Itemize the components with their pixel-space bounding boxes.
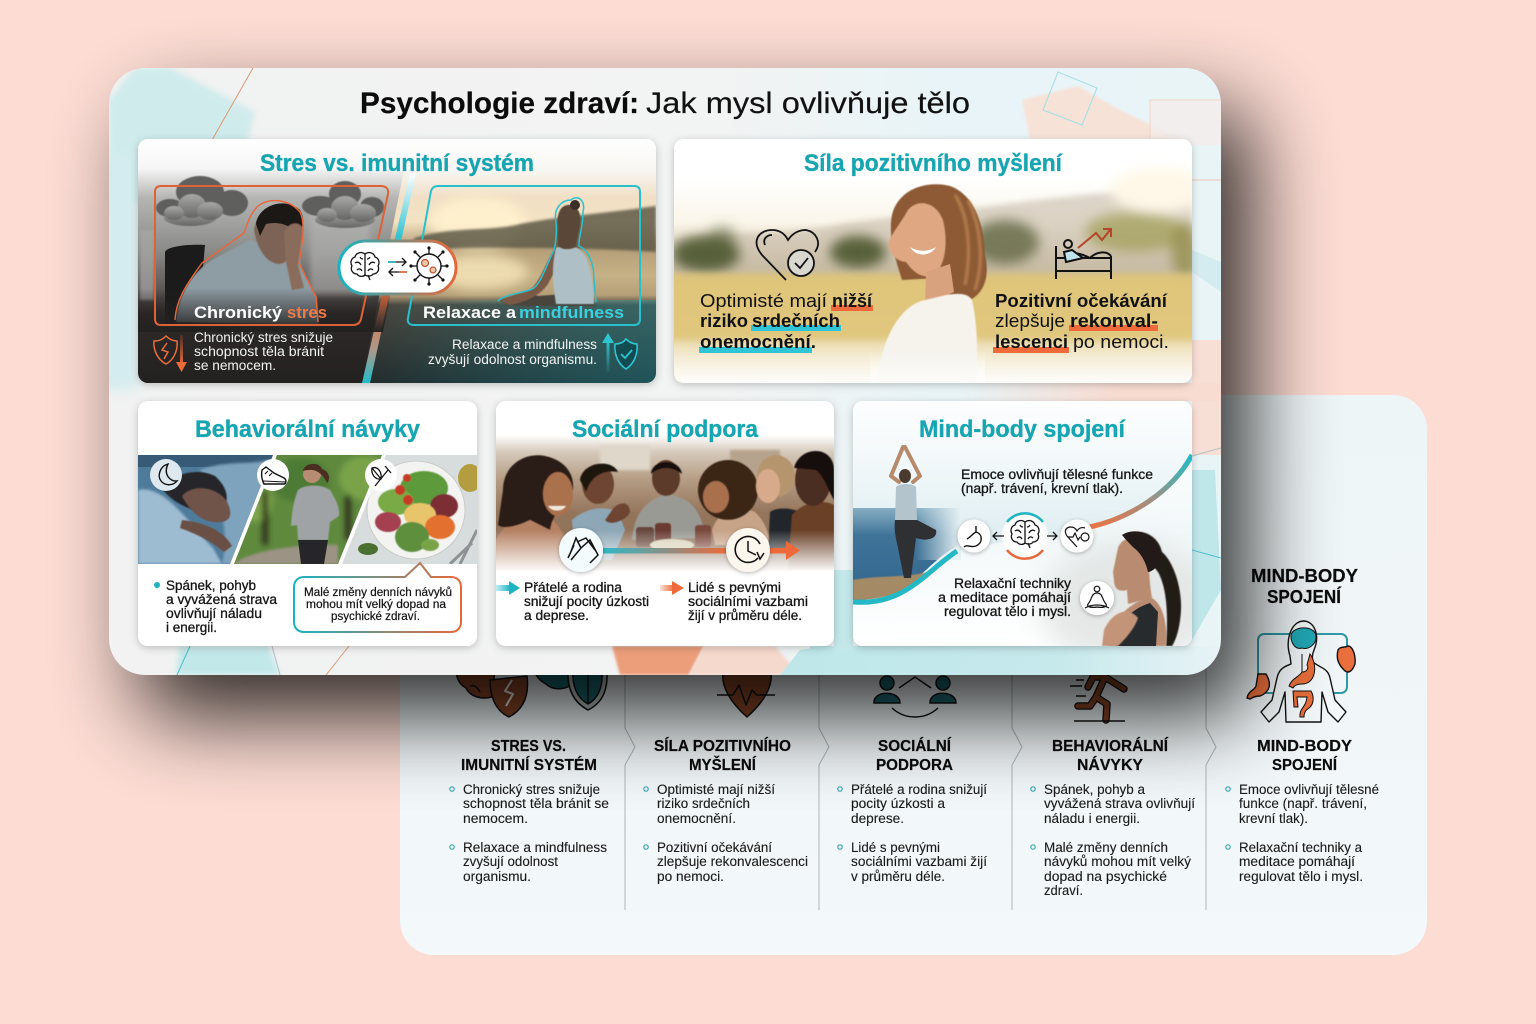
title: Jak mysl ovlivňuje tělo	[646, 87, 970, 120]
backdrop: sky and wave	[853, 435, 1192, 646]
panel: back summary sheet	[400, 395, 1427, 955]
heading: mind-body top label: MIND-BODY	[1251, 566, 1358, 586]
icon: stomach	[958, 520, 990, 552]
text: optimists	[699, 290, 873, 353]
text: positive expectation	[993, 290, 1169, 353]
column: stres vs. imunitní systém: zvyšují odolnost	[463, 854, 558, 869]
heading: mind-body spojení: Mind-body spojení	[919, 416, 1126, 443]
arrow: teal	[496, 581, 520, 595]
icon: brain and broken shield	[456, 660, 528, 717]
text: strong social ties: sociálními vazbami	[688, 594, 808, 609]
icon: heart with check	[757, 230, 818, 280]
column: behaviorální návyky: BEHAVIORÁLNÍ	[1052, 736, 1169, 755]
text: emotions	[961, 467, 1153, 496]
column: stres vs. imunitní systém	[450, 738, 609, 884]
column: mind-body spojení: regulovat tělo i mysl.	[1239, 869, 1363, 884]
icon: brain ring with arrows	[993, 513, 1057, 559]
panel: síla pozitivního myšlení	[668, 139, 1210, 383]
column: behaviorální návyky: zdraví.	[1044, 883, 1083, 898]
column: síla pozitivního myšlení: Optimisté mají nižší	[657, 782, 775, 797]
stressed scene backdrop	[138, 139, 418, 383]
text: positive expectation: rekonval-	[1070, 310, 1158, 331]
icon: shield with up arrow	[602, 333, 637, 372]
text: relaxation description: Relaxace a mindfulness	[452, 337, 597, 352]
column: mind-body spojení	[1226, 738, 1379, 884]
column: stres vs. imunitní systém: Chronický stres snižuje	[463, 782, 600, 797]
column: sociální podpora: Přátelé a rodina snižují	[851, 782, 987, 797]
icon: handshake	[559, 528, 603, 572]
text: optimists: riziko	[700, 310, 748, 331]
label: chronický stres: Chronický	[194, 303, 283, 322]
column: síla pozitivního myšlení: po nemoci.	[657, 869, 724, 884]
callout: small changes: psychické zdraví.	[331, 611, 420, 623]
label: relaxace a mindfulness: mindfulness	[519, 303, 624, 322]
panel: stres vs. imunitní systém	[138, 139, 656, 383]
icon: leaf and fork	[365, 459, 397, 491]
icon: heart with stethoscope	[1060, 520, 1094, 552]
text: strong social ties: žijí v průměru déle.	[688, 608, 802, 623]
text: friends and family: Přátelé a rodina	[524, 580, 623, 595]
column: mind-body spojení: MIND-BODY	[1257, 738, 1352, 755]
center pill: brain and virus	[339, 241, 456, 294]
column: behaviorální návyky: Malé změny denních	[1044, 840, 1168, 855]
photo: salad plate	[340, 455, 482, 564]
column: síla pozitivního myšlení: riziko srdečních	[657, 796, 750, 811]
text: positive expectation: Pozitivní očekávání	[995, 290, 1168, 311]
text: chronic stress description: Chronický stres snižuje	[194, 330, 333, 345]
text: chronic stress description	[194, 332, 332, 370]
arrow: orange	[660, 581, 684, 595]
column: sociální podpora: v průměru déle.	[851, 869, 945, 884]
icon: moon	[150, 459, 182, 491]
column: sociální podpora: PODPORA	[876, 757, 953, 774]
text: optimists: onemocnění.	[700, 331, 816, 352]
text: strong social ties: Lidé s pevnými	[688, 580, 781, 595]
column: behaviorální návyky: vyvážená strava ovlivňují	[1044, 796, 1195, 811]
icon: mind-body figure with organs	[1247, 621, 1355, 722]
text: chronic stress description: se nemocem.	[194, 358, 276, 373]
label: chronický stres	[194, 306, 326, 322]
column: stres vs. imunitní systém: STRES VS.	[491, 738, 566, 755]
orange frame	[155, 186, 388, 325]
text: optimists: srdečních	[752, 310, 840, 331]
text: sleep and exercise: a vyvážená strava	[166, 592, 277, 607]
icon: heart with pulse	[717, 672, 775, 717]
icon: patient in bed with growth arrow	[1056, 229, 1111, 279]
arrow: connector bar	[603, 541, 800, 560]
column: mind-body spojení: SPOJENÍ	[1272, 755, 1338, 774]
meditating woman	[498, 198, 596, 306]
diagonal divider	[362, 173, 416, 383]
heading: sociální podpora: Sociální podpora	[572, 416, 759, 443]
clouds	[156, 176, 384, 228]
text: sleep and exercise: i energii.	[166, 620, 217, 635]
column: mind-body spojení: meditace pomáhají	[1239, 854, 1355, 869]
column: sociální podpora	[838, 736, 987, 884]
column: mind-body spojení: krevní tlak).	[1239, 811, 1308, 826]
stressed man at desk	[138, 201, 392, 332]
column: stres vs. imunitní systém: Relaxace a mindfulness	[463, 840, 607, 855]
column dividers	[625, 660, 1216, 910]
front card shadow	[139, 110, 1251, 717]
column: behaviorální návyky: dopad na psychické	[1044, 869, 1167, 884]
text: optimists: nižší	[832, 290, 873, 311]
column: síla pozitivního myšlení	[644, 736, 808, 884]
text: sleep and exercise: ovlivňují náladu	[166, 606, 262, 621]
panel: front card	[100, 68, 1221, 675]
sunny meadow backdrop	[674, 166, 1192, 383]
photo: sleeping woman	[138, 455, 278, 564]
photo: jogging woman	[230, 455, 391, 564]
column: síla pozitivního myšlení: SÍLA POZITIVNÍHO	[654, 736, 791, 755]
callout: small changes	[294, 563, 461, 632]
photo: breathing woman	[1102, 531, 1181, 646]
column: sociální podpora: pocity úzkosti a	[851, 796, 945, 811]
column: behaviorální návyky: návyků mohou mít velký	[1044, 854, 1191, 869]
text: sleep and exercise	[154, 578, 277, 635]
column: síla pozitivního myšlení: onemocnění.	[657, 811, 736, 826]
text: friends and family: a deprese.	[524, 608, 589, 623]
text: optimists: Optimisté mají	[700, 290, 828, 311]
calm lake backdrop	[362, 139, 656, 383]
text: emotions: Emoce ovlivňují tělesné funkce	[961, 467, 1153, 482]
column: sociální podpora: deprese.	[851, 811, 904, 826]
column: síla pozitivního myšlení: MYŠLENÍ	[689, 755, 757, 774]
heading: mind-body top label: SPOJENÍ	[1267, 586, 1342, 607]
icon: running shoe	[257, 459, 289, 491]
text: positive expectation: lescenci	[995, 331, 1068, 352]
icon: brain and protective shield	[534, 660, 607, 710]
heading: stres vs. imunitní systém: Stres vs. imunitní systém	[260, 150, 534, 177]
heading: behaviorální návyky: Behaviorální návyky	[195, 416, 421, 443]
wave: orange to teal right segment	[1090, 455, 1192, 527]
text: relaxation techniques	[938, 576, 1071, 619]
teal frame	[408, 186, 640, 325]
column: sociální podpora: SOCIÁLNÍ	[878, 736, 952, 755]
photo: friends at a table	[496, 437, 834, 570]
wave: teal left segment	[853, 551, 957, 602]
icon: two connected people	[874, 676, 956, 717]
text: strong social ties	[688, 580, 808, 623]
column: síla pozitivního myšlení: zlepšuje rekonvalescenci	[657, 854, 808, 869]
heading: mind-body top label	[1251, 566, 1358, 607]
panel: behaviorální návyky	[138, 401, 482, 646]
callout: small changes: mohou mít velký dopad na	[306, 599, 447, 611]
column: behaviorální návyky: NÁVYKY	[1077, 755, 1143, 774]
text: relaxation techniques: Relaxační techniky	[954, 576, 1071, 591]
label: chronický stres: stres	[287, 303, 327, 322]
text: relaxation techniques: a meditace pomáhají	[938, 590, 1071, 605]
heading: síla pozitivního myšlení: Síla pozitivního myšlení	[804, 150, 1063, 177]
text: positive expectation: po nemoci.	[1073, 331, 1169, 352]
backdrop: right woman	[1040, 540, 1220, 670]
text: relaxation techniques: regulovat tělo i mysl.	[944, 604, 1071, 619]
panel: sociální podpora	[496, 401, 834, 646]
column: stres vs. imunitní systém: organismu.	[463, 869, 531, 884]
text: relaxation description: zvyšují odolnost organismu.	[428, 352, 597, 367]
label: relaxace a mindfulness: Relaxace a	[423, 303, 517, 322]
column: behaviorální návyky	[1031, 736, 1195, 898]
photo: sea and yoga woman	[853, 447, 961, 600]
text: relaxation description	[428, 337, 597, 367]
column: behaviorální návyky: Spánek, pohyb a	[1044, 782, 1145, 797]
column: síla pozitivního myšlení: Pozitivní očekávání	[657, 840, 772, 855]
text: friends and family: snižují pocity úzkosti	[524, 594, 649, 609]
icon: running person	[1070, 677, 1125, 721]
text: friends and family	[524, 580, 649, 623]
text: sleep and exercise: Spánek, pohyb	[166, 578, 256, 593]
title: Psychologie zdraví:	[360, 87, 639, 120]
column: mind-body spojení: Relaxační techniky a	[1239, 840, 1362, 855]
smiling woman	[870, 184, 987, 383]
label: relaxace a mindfulness	[424, 306, 624, 318]
panel: mind-body spojení	[849, 399, 1196, 652]
column: stres vs. imunitní systém: nemocem.	[463, 811, 528, 826]
column: mind-body spojení: Emoce ovlivňují tělesné	[1239, 782, 1379, 797]
icon: meditation figure	[1080, 581, 1114, 615]
card background shapes	[100, 68, 1221, 675]
column: sociální podpora: sociálními vazbami žijí	[851, 854, 987, 869]
icon: clock	[726, 528, 770, 572]
column: mind-body spojení: funkce (např. trávení,	[1239, 796, 1367, 811]
icon: broken shield with down arrow	[154, 335, 187, 372]
text: positive expectation: zlepšuje	[995, 310, 1065, 331]
text: emotions: (např. trávení, krevní tlak).	[961, 481, 1123, 496]
column: stres vs. imunitní systém: schopnost těla bránit se	[463, 796, 609, 811]
column: stres vs. imunitní systém: IMUNITNÍ SYSTÉM	[461, 755, 597, 774]
column: behaviorální návyky: náladu i energii.	[1044, 811, 1140, 826]
callout: small changes: Malé změny denních návyků	[304, 587, 452, 599]
column: sociální podpora: Lidé s pevnými	[851, 840, 940, 855]
text: chronic stress description: schopnost těla bránit	[194, 344, 324, 359]
title	[360, 87, 970, 120]
